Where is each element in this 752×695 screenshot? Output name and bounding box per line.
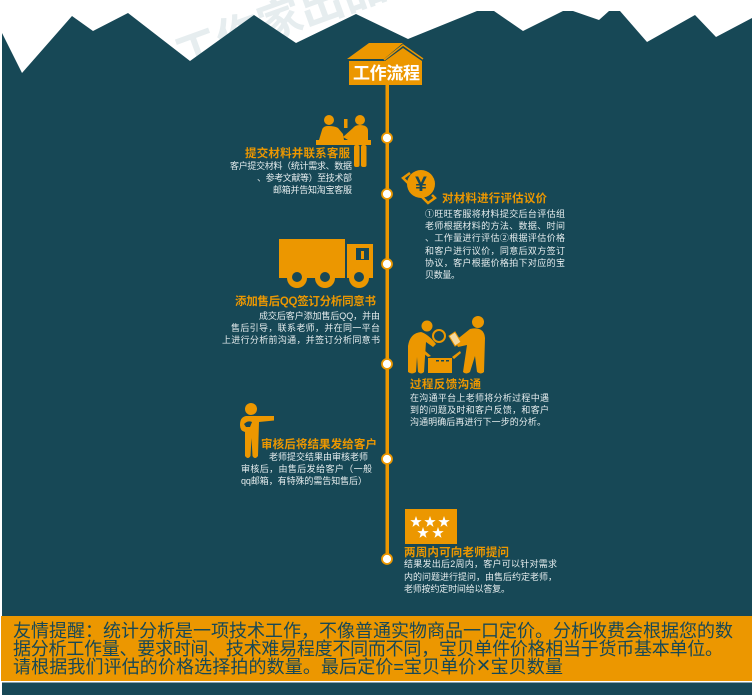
step heading: 提交材料并联系客服 <box>245 146 350 160</box>
step heading: 添加售后QQ签订分析同意书 <box>235 294 376 308</box>
reminder banner: 友情提醒：统计分析是一项技术工作，不像普通实物商品一口定价。分析收费会根据您的数 <box>13 621 733 641</box>
step description: 结果发出后2周内，客户可以针对需求 <box>404 558 557 569</box>
step 3: add QQ and sign agreement <box>222 239 380 345</box>
step description: 上进行分析前沟通，并签订分析同意书 <box>222 334 380 345</box>
step description: 售后引导，联系老师，并在同一平台 <box>231 322 380 333</box>
step description <box>241 451 372 486</box>
step description: 、参考文献等）至技术部 <box>257 172 352 183</box>
icon: two people inspecting a box <box>408 316 485 374</box>
step description: 到的问题及时和客户反馈，和客户 <box>410 404 549 415</box>
icon: delivery truck <box>279 239 373 288</box>
heading sign: house with title: 工作流程 <box>353 64 420 83</box>
step description: 贝数量。 <box>425 269 460 280</box>
step description: 在沟通平台上老师将分析过程中遇 <box>410 392 549 403</box>
step description: 协议，客户根据价格拍下对应的宝 <box>425 257 565 268</box>
step description: 老师根据材料的方法、数据、时间 <box>425 220 565 231</box>
reminder banner: 据分析工作量、要求时间、技术难易程度不同而不同，宝贝单件价格相当于货币基本单位。 <box>13 639 723 659</box>
step 1: submit materials <box>230 115 371 195</box>
icon: yen coin tag: ¥ <box>415 173 427 196</box>
step 4: feedback and communication <box>408 316 549 427</box>
step description: 老师提交结果由审核老师 <box>269 451 368 462</box>
step 2: evaluate and quote <box>403 170 565 280</box>
step description: 老师按约定时间给以答复。 <box>404 583 510 594</box>
step description <box>410 392 549 427</box>
step description: 邮箱并告知淘宝客服 <box>273 184 352 195</box>
step description: 、工作量进行评估②根据评估价格 <box>425 232 565 243</box>
step description: 成交后客户添加售后QQ，并由 <box>259 310 380 321</box>
step description <box>404 558 557 594</box>
step 6: questions within two weeks <box>404 509 557 594</box>
step description: ①旺旺客服将材料提交后台评估组 <box>425 208 565 219</box>
step description: 沟通明确后再进行下一步的分析。 <box>410 416 546 427</box>
step description: 内的问题进行提问，由售后约定老师， <box>404 571 557 582</box>
timeline nodes <box>382 133 392 564</box>
step heading: 审核后将结果发给客户 <box>261 437 377 451</box>
reminder banner <box>1 616 752 682</box>
step description: 和客户进行议价，同意后双方签订 <box>425 245 565 256</box>
timeline pole <box>386 85 389 560</box>
icon: five stars card <box>405 509 457 544</box>
step heading: 对材料进行评估议价 <box>442 191 548 205</box>
reminder banner: 请根据我们评估的价格选择拍的数量。最后定价=宝贝单价×宝贝数量 <box>13 652 563 679</box>
step description <box>425 208 565 280</box>
step description: qq邮箱，有特殊的需告知售后） <box>241 475 367 486</box>
step description: 审核后，由售后发给客户（一般 <box>241 463 372 474</box>
heading sign: house with title <box>347 43 423 85</box>
icon: yen coin tag <box>403 170 435 203</box>
step description <box>230 160 352 195</box>
step description <box>222 310 380 345</box>
step 5: send results after review <box>240 403 377 486</box>
step heading: 过程反馈沟通 <box>410 377 482 391</box>
step description: 客户提交材料（统计需求、数据 <box>230 160 352 171</box>
step heading: 两周内可向老师提问 <box>404 545 509 559</box>
icon: two people at counter <box>316 115 371 167</box>
icon: pointing person <box>240 403 274 458</box>
